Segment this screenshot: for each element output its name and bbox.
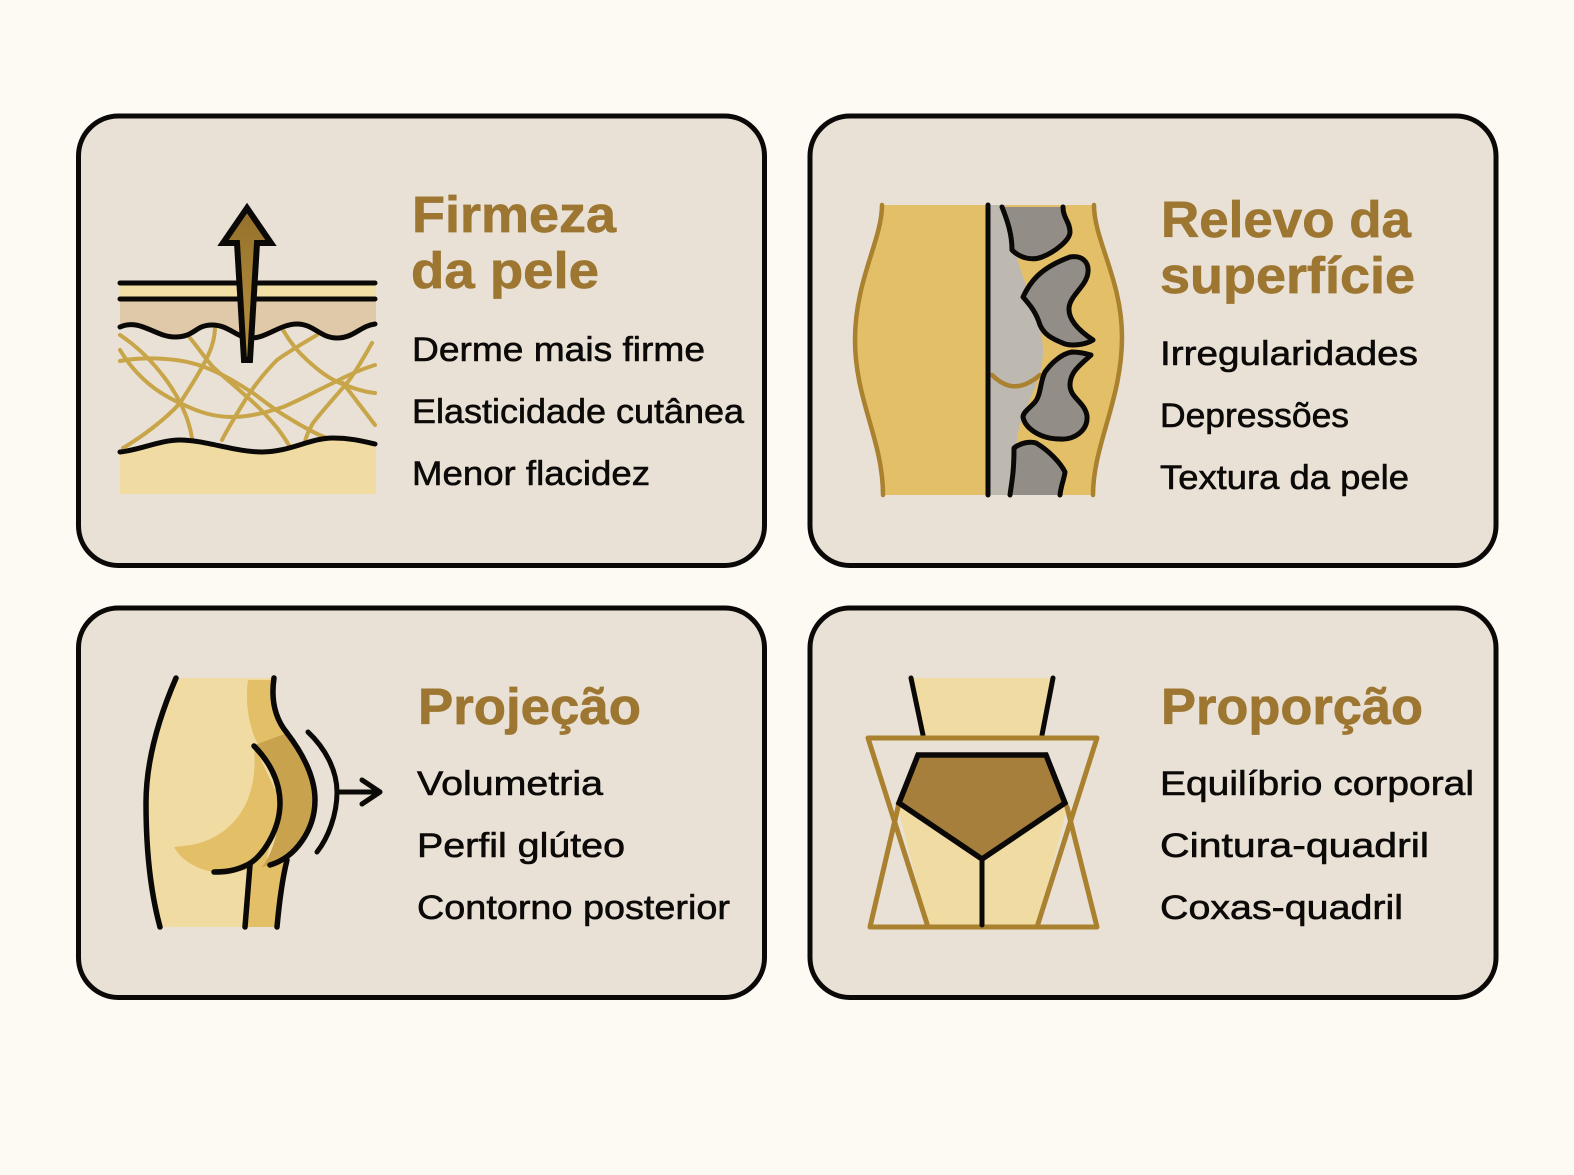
icon: skin layers with upward arrow	[120, 208, 376, 494]
text list: proporção: Equilíbrio corporal	[1160, 765, 1474, 803]
text list: projeção	[417, 765, 730, 927]
text list: projeção: Volumetria	[417, 765, 603, 803]
text list: firmeza: Menor flacidez	[412, 455, 650, 493]
panel: relevo da superfície	[810, 116, 1496, 566]
text list: firmeza	[412, 331, 744, 493]
heading: firmeza da pele: da pele	[411, 242, 599, 299]
text list: projeção: Perfil glúteo	[417, 827, 625, 865]
heading: projeção: Projeção	[418, 678, 641, 735]
text list: proporção: Cintura-quadril	[1160, 827, 1429, 865]
icon: skin surface with fat lobes	[855, 205, 1122, 495]
panel: firmeza da pele	[78, 116, 764, 566]
text list: relevo: Irregularidades	[1160, 335, 1418, 373]
icon: body proportion with triangles	[868, 678, 1097, 927]
text list: projeção: Contorno posterior	[417, 889, 730, 927]
text list: relevo: Depressões	[1160, 397, 1349, 435]
text list: proporção: Coxas-quadril	[1160, 889, 1403, 927]
heading: relevo da superfície: superfície	[1160, 247, 1415, 304]
icon: gluteal profile with arrow	[146, 678, 380, 927]
panel: projeção	[78, 608, 764, 998]
text list: firmeza: Elasticidade cutânea	[412, 393, 744, 431]
text list: proporção	[1160, 765, 1474, 927]
heading: firmeza da pele	[411, 186, 617, 299]
text list: relevo: Textura da pele	[1160, 459, 1409, 497]
panel: proporção	[810, 608, 1496, 998]
text list: firmeza: Derme mais firme	[412, 331, 705, 369]
text list: relevo	[1160, 335, 1418, 497]
heading: relevo da superfície	[1160, 191, 1415, 304]
heading: relevo da superfície: Relevo da	[1161, 191, 1412, 248]
heading: firmeza da pele: Firmeza	[412, 186, 617, 243]
heading: proporção: Proporção	[1161, 678, 1423, 735]
